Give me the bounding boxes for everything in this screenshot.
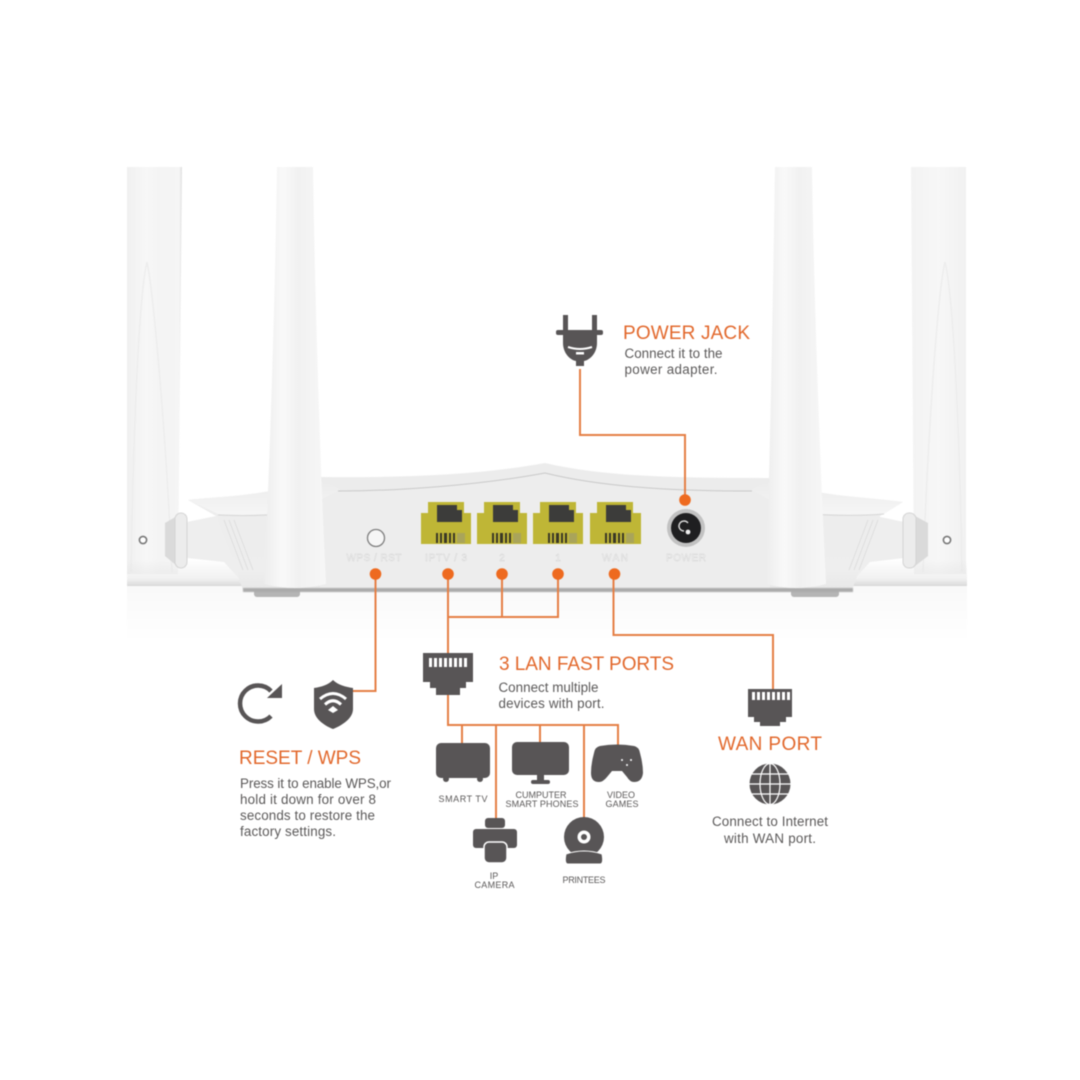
icon: reset arrow: [240, 684, 282, 722]
inner right antenna: [766, 167, 826, 588]
text: power jack description: Connect it to the: [624, 346, 722, 361]
icon: printer: [473, 818, 517, 863]
port: 1: [533, 502, 583, 544]
icon: plug: [556, 315, 603, 366]
table shadow left and right: [127, 560, 967, 586]
label: computer: SMART PHONES: [506, 799, 578, 809]
icon: smart TV: [436, 743, 490, 782]
text: reset wps description: seconds to restore the: [240, 808, 375, 823]
port labels: WPS / RST: [346, 553, 402, 564]
floor reflection: [127, 586, 967, 640]
icon: monitor: [512, 742, 569, 784]
heading: power jack: POWER JACK: [623, 323, 750, 344]
port labels: POWER: [666, 553, 706, 564]
WPS button: [368, 530, 384, 546]
power line: [580, 369, 685, 500]
label: IP camera: CAMERA: [474, 880, 514, 890]
text: LAN description: Connect multiple: [498, 680, 598, 695]
heading: reset wps: RESET / WPS: [239, 748, 361, 769]
icon: globe: [750, 764, 790, 804]
label: computer: CUMPUTER: [516, 790, 567, 800]
label: printer: PRINTEES: [562, 875, 606, 885]
icon: LAN connector: [423, 653, 473, 695]
icon: WPS shield: [314, 680, 353, 729]
inner left antenna: [264, 167, 326, 588]
port labels: 1: [555, 553, 561, 564]
port labels: 2: [499, 553, 505, 564]
port: WAN: [590, 502, 641, 544]
LAN lines: [448, 574, 618, 818]
router body: [188, 463, 903, 592]
icon: WAN connector: [748, 689, 792, 726]
WAN line: [614, 574, 773, 690]
text: WAN description: with WAN port.: [723, 831, 816, 846]
port: IPTV/3: [421, 502, 471, 544]
icon: webcam: [564, 817, 604, 864]
text: WAN description: Connect to Internet: [712, 814, 828, 829]
far right antenna: [911, 167, 966, 574]
text: reset wps description: factory settings.: [240, 824, 336, 839]
text: LAN description: devices with port.: [498, 696, 604, 711]
power socket: [667, 509, 705, 547]
right hinge: [850, 513, 951, 584]
port labels: WAN: [602, 553, 628, 564]
heading: LAN ports: 3 LAN FAST PORTS: [499, 654, 674, 675]
label: IP camera: IP: [490, 871, 498, 881]
heading: WAN port: WAN PORT: [718, 734, 822, 755]
text: reset wps description: Press it to enable WPS,or: [240, 776, 392, 791]
label: video games: VIDEO: [607, 790, 635, 800]
connector lines: [353, 369, 773, 818]
icon: gamepad: [591, 744, 643, 782]
far left antenna: [127, 167, 182, 574]
orange dots: [370, 494, 691, 580]
text: reset wps description: hold it down for over 8: [240, 792, 376, 807]
port labels: IPTV / 3: [425, 553, 467, 564]
left hinge: [139, 513, 244, 584]
text: power jack description: power adapter.: [624, 362, 718, 377]
router feet: [254, 588, 839, 597]
router photo: [127, 167, 967, 640]
reset line: [353, 574, 376, 691]
port labels: [346, 553, 706, 564]
label: video games: GAMES: [606, 799, 638, 809]
label: smart TV: SMART TV: [438, 794, 488, 804]
port: 2: [477, 502, 527, 544]
